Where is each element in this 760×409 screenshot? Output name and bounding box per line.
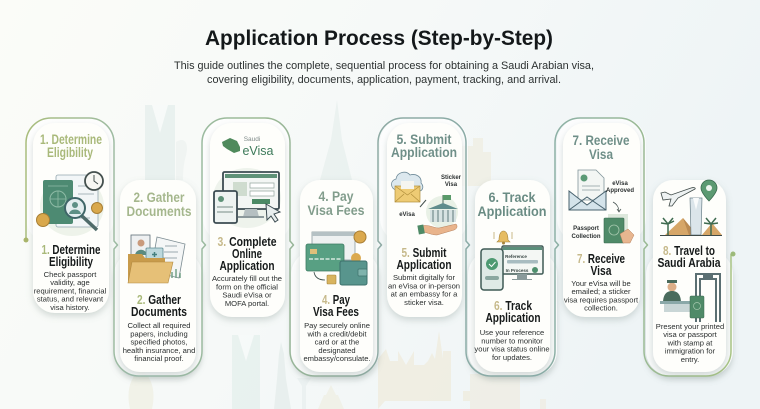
step 5 header: Application <box>391 145 457 160</box>
step 8 description: immigration for <box>665 347 716 356</box>
step 5 title: 5. Submit <box>402 246 447 260</box>
step 7 header <box>572 133 630 162</box>
step 1 description: visa history. <box>50 303 90 312</box>
step 3 title: Application <box>220 259 274 273</box>
step 8 description: visa or passport <box>663 330 718 339</box>
step 1 title: 1. Determine <box>42 243 101 257</box>
icon: credit card and wallet <box>306 231 367 285</box>
step 3 description: Accurately fill out the <box>212 274 282 283</box>
icon: envelope and embassy: Sticker <box>441 175 462 181</box>
step 2 header: Documents <box>126 204 192 219</box>
step 1 description: Check passport <box>44 270 96 279</box>
icon: email and passport: Passport <box>573 226 599 232</box>
step 3 description: Saudi eVisa or <box>222 291 272 300</box>
icon: envelope and embassy <box>391 172 462 235</box>
step 6 title: Application <box>486 311 540 325</box>
step 5 header <box>391 132 457 160</box>
step 1 title <box>42 243 101 269</box>
icon: email and passport: Collection <box>571 234 601 240</box>
step 6 description: your visa status online <box>474 345 550 354</box>
step 4 description: card or at the <box>315 338 359 347</box>
step 7 description: collection. <box>584 304 618 313</box>
step 6 header <box>478 190 546 219</box>
step 1 description: requirement, financial <box>34 286 107 295</box>
step 6 description: number to monitor <box>481 336 543 345</box>
step 2 title: 2. Gather <box>137 293 181 307</box>
icon: email and passport <box>569 170 634 243</box>
icon: passport and magnifier <box>36 172 104 236</box>
step 2 header: 2. Gather <box>134 190 185 205</box>
icon: phone, monitor and bell: Reference <box>505 254 527 259</box>
icon: folder with documents <box>128 235 185 283</box>
step 5 description: an eVisa or in-person <box>388 281 460 290</box>
intro text: covering eligibility, documents, application, payment, tracking, and arrival. <box>207 74 561 86</box>
step 2 title: Documents <box>131 305 187 319</box>
step 8 description: entry. <box>681 355 699 364</box>
panel: step 1 determine eligibility <box>33 123 109 313</box>
step 4 title: 4. Pay <box>322 293 350 307</box>
step 4 description: with a credit/debit <box>306 329 367 338</box>
step 3 title: Online <box>232 247 262 261</box>
panel: step 4 pay visa fees <box>300 180 373 372</box>
step 5 description: sticker visa. <box>404 298 444 307</box>
step 2 title <box>131 293 187 319</box>
icon: email and passport: Approved <box>606 188 634 194</box>
panel: step 2 gather documents <box>120 180 196 372</box>
step 1 header: 1. Determine <box>40 132 102 147</box>
panel: step 5 submit application <box>387 123 462 317</box>
step 5 title <box>396 246 452 272</box>
step 1 description: validity, age <box>50 278 90 287</box>
step 7 description: emailed; a sticker <box>571 287 631 296</box>
intro text: This guide outlines the complete, sequential process for obtaining a Saudi Arabian visa, <box>174 60 594 72</box>
panel: step 3 complete online application <box>210 123 285 317</box>
step 7 description: visa requires passport <box>564 295 639 304</box>
step 8 title: 8. Travel to <box>663 244 715 258</box>
step 4 description: embassy/consulate. <box>303 354 371 363</box>
step 6 title <box>486 299 540 325</box>
capsule backings <box>26 118 733 376</box>
step 1 description: status, and relevant <box>37 295 104 304</box>
step 1 header <box>40 132 102 160</box>
step 4 header: Visa Fees <box>308 203 364 218</box>
step 3 title <box>218 235 277 273</box>
step 4 description: Pay securely online <box>304 321 370 330</box>
icon: Saudi eVisa logo: Saudi <box>244 136 260 143</box>
step 4 title <box>313 293 359 319</box>
step 1 title: Eligibility <box>49 255 93 269</box>
step 4 description: designated <box>318 346 356 355</box>
step 4 header: 4. Pay <box>318 189 354 204</box>
background skyline landmarks <box>128 100 546 409</box>
step 6 title: 6. Track <box>494 299 532 313</box>
icon: Saudi eVisa logo <box>222 136 274 158</box>
step 8 description: with stamp at <box>667 338 713 347</box>
icon: phone, monitor and bell: In Process <box>506 268 529 273</box>
panel: step 8 travel to saudi arabia <box>653 180 726 372</box>
step 4 title: Visa Fees <box>313 305 359 319</box>
icon: envelope and embassy: Visa <box>445 182 458 188</box>
step 2 description: Collect all required <box>128 321 190 330</box>
step 8 title: Saudi Arabia <box>658 256 721 270</box>
step 5 title: Application <box>396 258 452 272</box>
step 8 title <box>658 244 721 270</box>
step 5 description: at an embassy for a <box>391 290 458 299</box>
icon: envelope and embassy: eVisa <box>399 212 415 218</box>
panel: step 6 track application <box>474 180 550 372</box>
step 7 header: 7. Receive <box>572 133 630 148</box>
step 2 description: financial proof. <box>134 354 184 363</box>
icon: computer and tablet <box>213 168 281 228</box>
step 7 header: Visa <box>589 147 613 162</box>
step 5 description: Submit digitally for <box>393 273 455 282</box>
icon: phone, monitor and bell <box>481 231 543 290</box>
title: Application Process (Step-by-Step) <box>205 26 553 50</box>
step 3 title: 3. Complete <box>218 235 277 249</box>
step 7 title: Visa <box>590 264 612 278</box>
step 6 description: Use your reference <box>480 328 544 337</box>
step 2 header <box>126 190 192 219</box>
step 2 description: specified photos, <box>130 338 188 347</box>
step 6 header: 6. Track <box>488 190 536 205</box>
step 5 header: 5. Submit <box>396 132 452 147</box>
step 7 title: 7. Receive <box>577 252 625 266</box>
panel: step 7 receive visa <box>563 123 640 317</box>
icon: immigration officer <box>660 274 720 322</box>
icon: plane, tower and pyramid <box>660 180 722 236</box>
step 2 description: papers, including <box>130 329 188 338</box>
step 6 header: Application <box>478 204 546 219</box>
step 4 header <box>308 189 364 218</box>
icon: email and passport: eVisa <box>612 181 628 187</box>
step 3 description: MOFA portal. <box>225 299 269 308</box>
intro text <box>174 60 594 86</box>
step 8 description: Present your printed <box>656 322 724 331</box>
step 7 description: Your eVisa will be <box>571 279 631 288</box>
serpentine connector line <box>24 118 736 376</box>
step 6 description: for updates. <box>492 353 532 362</box>
step 7 title <box>577 252 625 278</box>
icon: Saudi eVisa logo: eVisa <box>242 144 274 158</box>
step 1 header: Eligibility <box>47 145 93 160</box>
step 2 description: health insurance, and <box>123 346 195 355</box>
step 3 description: form on the official <box>216 282 278 291</box>
